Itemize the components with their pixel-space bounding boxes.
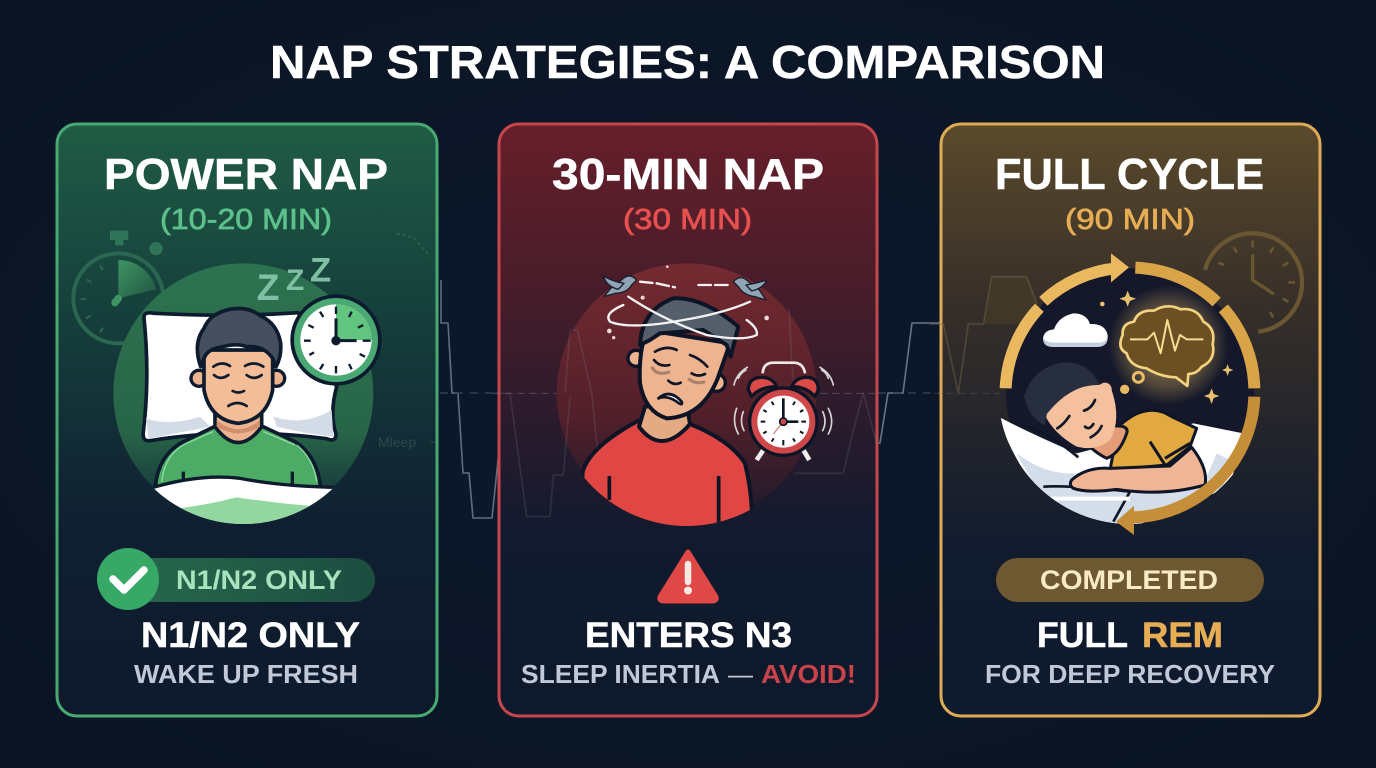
illustration: sleeper in cycle ring [930,233,1302,535]
note: sleep inertia avoid [521,659,856,689]
icon: right bird [733,278,767,300]
note: sleep inertia avoid: AVOID! [761,659,856,689]
illustration: sleeping man with clock [73,231,430,533]
badge: completed [996,558,1264,602]
badge: completed: COMPLETED [1040,565,1218,595]
faint label: sleep: Mleep [378,434,416,450]
faint top-right mark [397,233,430,257]
figure: neck [639,403,690,441]
panel: power nap [57,124,437,716]
heading: power nap: POWER NAP [104,150,388,199]
note: sleep inertia avoid: SLEEP INERTIA [521,659,720,689]
figure: neck [215,413,262,442]
figure: man's shirt [155,426,321,487]
circle backdrop [113,263,373,523]
stage summary: full rem [1037,616,1223,655]
title: NAP STRATEGIES: A COMPARISON [270,36,1105,88]
cycle ring with arrows [1006,253,1254,535]
letters: zzz: Z [286,264,304,297]
stage summary: n1/n2 only: N1/N2 ONLY [141,616,360,655]
stage summary: full rem: REM [1142,616,1223,655]
icon: faint clock [1205,233,1302,332]
icon: glowing brain [1108,285,1228,405]
figure: head [628,298,738,418]
stage summary: enters n3: ENTERS N3 [585,616,792,655]
blanket [152,475,336,524]
duration: 10-20 min: (10-20 MIN) [160,204,332,236]
faint sleep line [564,308,794,447]
icon: check mark [97,548,159,610]
circle backdrop [557,263,817,523]
duration: 30 min: (30 MIN) [623,204,752,236]
illustration: groggy man with alarm clock [493,263,878,530]
letters: zzz: Z [310,251,331,289]
icon: faint stopwatch [73,231,163,343]
heading: full cycle: FULL CYCLE [995,150,1264,199]
figure: shirt [580,421,752,530]
bed and pillow [998,417,1243,528]
heading: 30-min nap: 30-MIN NAP [552,150,824,199]
faint sleep line [930,277,1037,393]
badge: n1/n2 only: N1/N2 ONLY [176,565,342,595]
duration: 90 min: (90 MIN) [1065,204,1195,236]
dizzy swirl and birds [603,265,769,339]
note: for deep recovery: FOR DEEP RECOVERY [985,659,1275,689]
icon: cloud [1043,313,1108,347]
panel: full cycle [930,124,1320,716]
panel: 30-min nap [493,124,878,716]
icon: left bird [603,276,637,297]
note: wake up fresh: WAKE UP FRESH [134,659,358,689]
icon: alarm clock [734,363,833,460]
badge: n1/n2 only [97,548,375,610]
icon: wall clock [290,294,382,386]
figure: head [191,308,285,423]
figure: sleeper [1025,363,1206,492]
icon: warning triangle [660,552,716,601]
note: sleep inertia avoid: — [728,659,753,689]
inner disc [1006,268,1254,516]
sparkles [1100,291,1233,404]
stage summary: full rem: FULL [1037,616,1128,655]
icon: pillow [143,313,337,441]
letters: zzz [257,251,331,308]
faint plateau fill [983,277,1037,324]
chart: sleep stage line between cards [440,280,940,518]
faint label: sleep [378,434,437,450]
letters: zzz: Z [257,266,279,308]
